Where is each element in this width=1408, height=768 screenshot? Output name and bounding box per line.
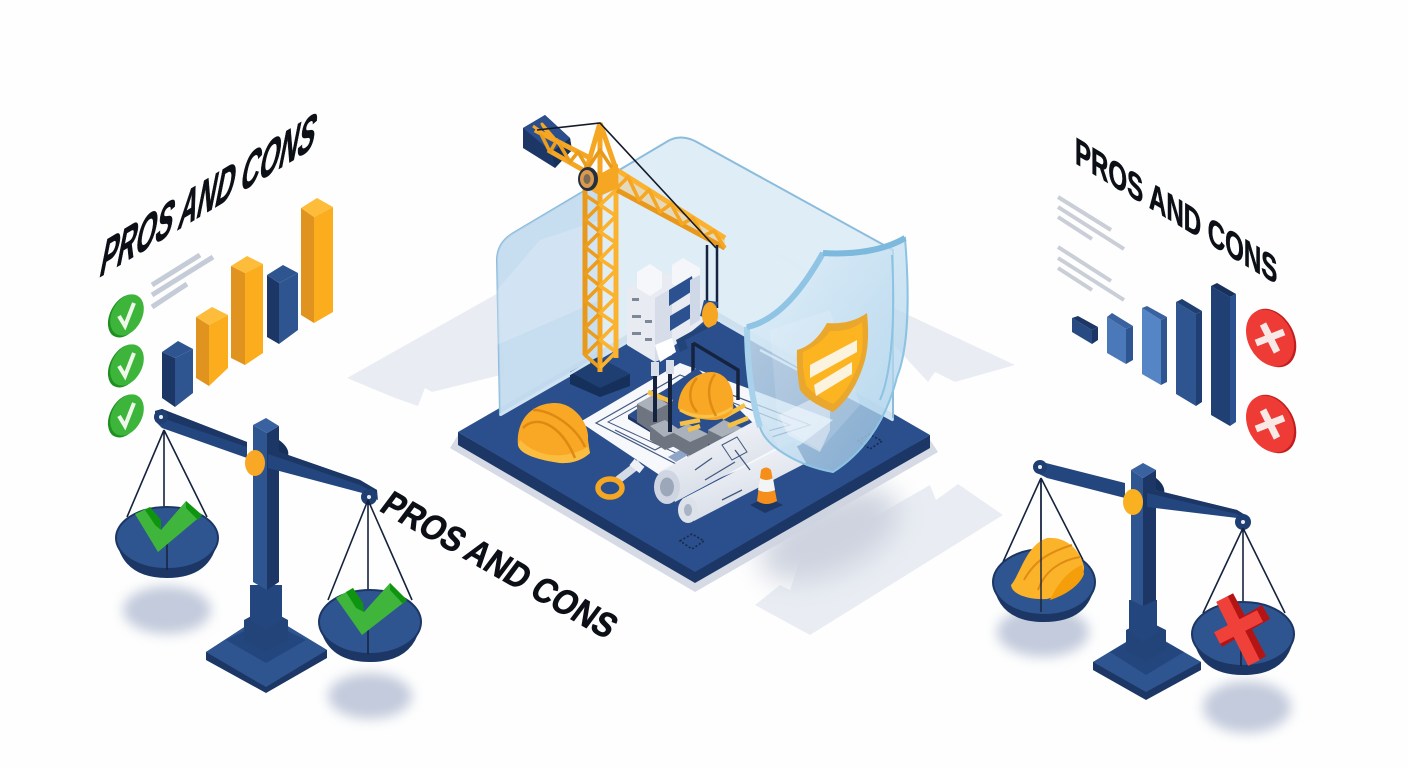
background arrows	[347, 250, 1015, 635]
heading: right pros and cons: PROS AND CONS	[1075, 130, 1277, 294]
crane	[523, 115, 725, 397]
blueprint sheet	[580, 363, 833, 490]
left bar chart	[162, 198, 333, 407]
right balance scale	[1033, 460, 1251, 700]
building	[627, 258, 716, 362]
right pan with check	[319, 500, 421, 662]
wrench	[598, 462, 642, 497]
red cross badges	[1236, 300, 1306, 462]
platform markers	[680, 434, 882, 549]
right scale shadows	[997, 607, 1291, 733]
heading: center pros and cons: PROS AND CONS	[373, 484, 626, 646]
right bar chart	[1072, 283, 1236, 426]
central site with helmet	[628, 360, 753, 462]
gold shield emblem	[797, 313, 868, 412]
blueprint rolls	[654, 417, 806, 523]
right pan with cross	[1192, 528, 1294, 675]
left balance scale	[154, 409, 378, 693]
green check badges	[101, 289, 151, 443]
protective glass shield	[747, 238, 908, 472]
glass enclosure	[497, 138, 893, 420]
glass front floor edges	[500, 350, 893, 420]
safety helmet	[518, 403, 590, 463]
left text lines	[152, 255, 213, 307]
right text lines	[1058, 197, 1124, 300]
hook and frame	[685, 245, 738, 400]
heading: left chart title: PROS AND CONS	[96, 100, 322, 290]
platform base	[458, 297, 930, 583]
platform shadow	[450, 435, 938, 601]
left pan with check	[116, 430, 218, 578]
left scale shadows	[123, 586, 412, 719]
traffic cone	[750, 468, 783, 513]
left pan with helmet	[993, 478, 1095, 622]
